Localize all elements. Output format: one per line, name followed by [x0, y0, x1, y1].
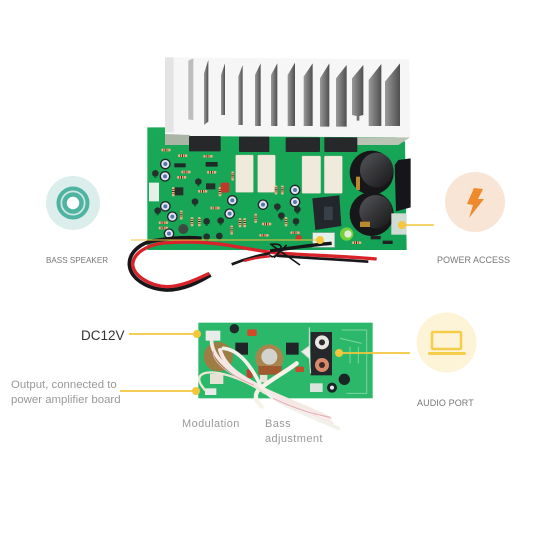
- label: output connection: power amplifier board: [11, 394, 121, 406]
- label: audio port: AUDIO PORT: [417, 398, 474, 408]
- label: output connection: Output, connected to: [11, 379, 117, 391]
- connector lines and dots: [120, 222, 434, 394]
- integrated circuits: [235, 343, 299, 355]
- line: bass speaker to board: [131, 236, 324, 244]
- label: modulation: Modulation: [182, 418, 240, 430]
- large capacitors: [350, 151, 394, 236]
- power terminal: [391, 213, 407, 235]
- control circuit board: [198, 323, 373, 398]
- red and black power wires: [129, 238, 377, 290]
- potentiometers: [204, 342, 283, 375]
- small parts: [205, 324, 350, 395]
- white signal cables: [199, 338, 338, 428]
- label: bass adjustment: adjustment: [265, 433, 323, 445]
- label: bass speaker: BASS SPEAKER: [46, 256, 108, 265]
- cement resistors: [236, 155, 342, 193]
- label: power access: POWER ACCESS: [437, 255, 510, 265]
- label: bass adjustment: Bass: [265, 418, 291, 430]
- line: DC12V to board: [129, 330, 200, 338]
- small components: [152, 149, 393, 244]
- line: audio port to board: [336, 350, 410, 356]
- RCA audio jacks: [302, 327, 332, 375]
- line: power access to board: [398, 222, 434, 228]
- black side bracket: [395, 158, 411, 211]
- control board photo: [198, 323, 373, 428]
- icon: lightning bolt: [445, 172, 505, 232]
- icon: speaker: [46, 176, 100, 230]
- icon: laptop: [416, 312, 476, 372]
- green circuit board: [147, 127, 407, 250]
- line: output to board: [120, 388, 200, 394]
- heatsink: [165, 57, 410, 137]
- power transistors: [189, 136, 357, 152]
- relay: [312, 195, 341, 230]
- white connectors: [149, 183, 335, 247]
- board traces: [340, 330, 367, 393]
- heatsink base shadow: [165, 134, 190, 145]
- label: DC12V: DC12V: [81, 328, 125, 343]
- amplifier board photo: [147, 57, 411, 250]
